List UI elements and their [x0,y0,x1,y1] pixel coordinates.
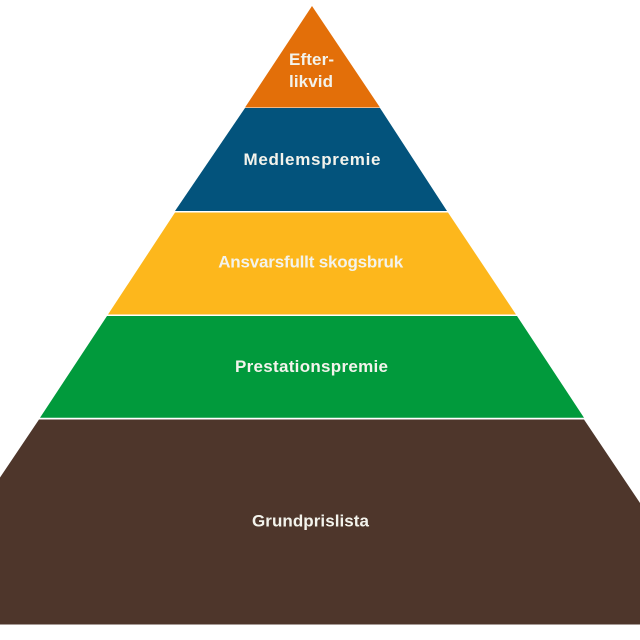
tier: Efterlikvid [245,6,380,108]
tier: Prestationspremie: Prestationspremie [235,357,388,376]
tier: Prestationspremie [40,316,584,418]
tier: Ansvarsfullt skogsbruk: Ansvarsfullt skogsbruk [218,252,404,272]
tier: Medlemspremie [175,108,447,211]
tier: Medlemspremie: Medlemspremie [244,150,380,169]
tier: Efterlikvid: Efter- [289,50,334,69]
tier: Grundprislista: Grundprislista [252,512,370,530]
tier: Ansvarsfullt skogsbruk [108,212,516,314]
tier: Efterlikvid: likvid [289,72,333,91]
